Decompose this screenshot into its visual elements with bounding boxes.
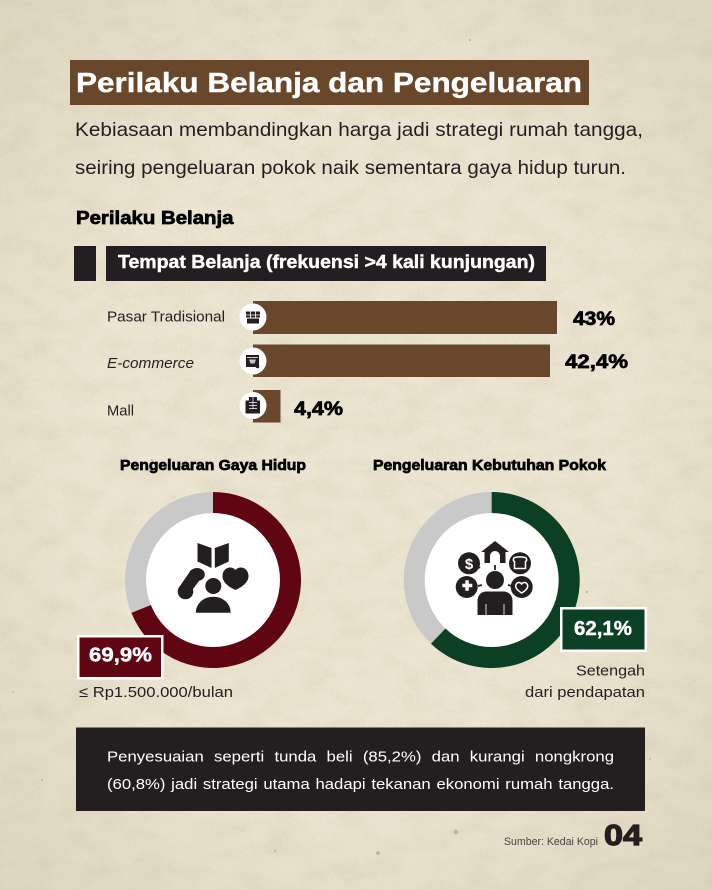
section heading: Perilaku Belanja <box>76 208 235 228</box>
panel: tempat belanja header <box>74 246 546 281</box>
callout: 62,1%: 62,1% <box>574 618 632 640</box>
subtitle text: Kebiasaan membandingkan harga jadi strategi rumah tangga, <box>75 119 643 141</box>
callout: kesimpulan <box>76 728 645 811</box>
bar: mall <box>107 390 343 422</box>
icon: person with basic needs <box>456 541 533 615</box>
callout: kesimpulan: Penyesuaian seperti tunda beli (85,2%) dan kurangi nongkrong <box>107 748 614 766</box>
bar: pasar tradisional <box>107 301 615 334</box>
panel: tempat belanja header: Tempat Belanja (frekuensi >4 kali kunjungan) <box>118 252 535 272</box>
caption: setengah dari pendapatan: Setengah <box>576 662 645 680</box>
subtitle text: seiring pengeluaran pokok naik sementara gaya hidup turun. <box>75 157 626 179</box>
icon: person with basic needs: $ <box>465 556 474 573</box>
source note: Sumber: Kedai Kopi <box>504 836 598 848</box>
title: Perilaku Belanja dan Pengeluaran <box>76 67 582 98</box>
donut chart: 62,1% <box>404 492 580 668</box>
bar: e-commerce: E-commerce <box>107 356 194 372</box>
bar: e-commerce: 42,4% <box>565 351 628 373</box>
subtitle text <box>75 119 643 179</box>
callout: 69,9%: 69,9% <box>89 644 152 666</box>
callout: kesimpulan: (60,8%) jadi strategi utama hadapi tekanan ekonomi rumah tangga. <box>107 776 614 793</box>
panel: pengeluaran gaya hidup <box>78 457 306 701</box>
bar: mall: Mall <box>107 404 134 420</box>
icon: book, music, heart, person <box>178 543 248 613</box>
caption: batas pengeluaran: ≤ Rp1.500.000/bulan <box>79 684 233 701</box>
bar: mall: 4,4% <box>294 398 343 420</box>
title <box>70 60 589 105</box>
heading: gaya hidup: Pengeluaran Gaya Hidup <box>120 457 306 474</box>
callout: 69,9% <box>78 636 162 678</box>
bar: pasar tradisional: Pasar Tradisional <box>107 310 225 326</box>
caption: setengah dari pendapatan <box>525 662 645 701</box>
bar: e-commerce <box>107 344 628 377</box>
panel: pengeluaran kebutuhan pokok <box>373 457 646 701</box>
caption: setengah dari pendapatan: dari pendapatan <box>525 684 645 701</box>
page number: 04 <box>604 820 642 852</box>
heading: kebutuhan pokok: Pengeluaran Kebutuhan Pokok <box>373 457 607 474</box>
donut chart: 69,9% <box>125 492 301 668</box>
bar chart: tempat belanja <box>107 301 628 422</box>
callout: 62,1% <box>561 608 646 651</box>
bar: pasar tradisional: 43% <box>573 308 615 330</box>
